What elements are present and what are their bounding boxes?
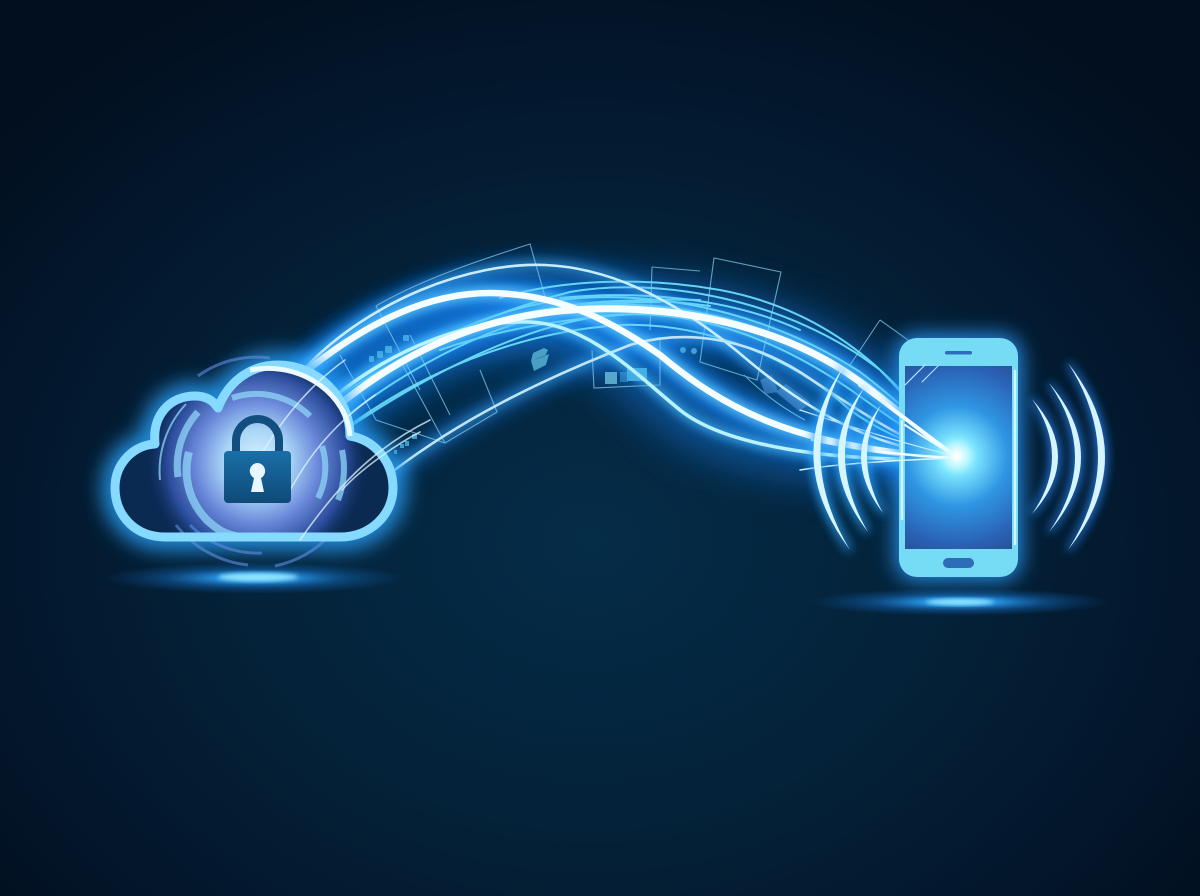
light stream: bright strands	[305, 265, 955, 472]
cloud outline	[115, 365, 393, 537]
floor glow under cloud	[105, 562, 405, 594]
phone glow	[895, 334, 1022, 581]
padlock shackle	[236, 419, 279, 455]
light stream halo	[305, 265, 955, 472]
light stream: thin bundle	[325, 282, 955, 456]
cloud with padlock	[105, 350, 430, 574]
padlock	[224, 419, 291, 503]
phone body	[899, 338, 1018, 577]
signal waves, left of phone	[813, 366, 883, 550]
cloud glow	[115, 365, 393, 537]
phone screen	[905, 366, 1012, 549]
floor glow under phone	[810, 588, 1110, 616]
keyhole	[250, 463, 265, 492]
padlock body	[224, 451, 291, 503]
cloud-top stream crossing	[252, 360, 430, 540]
bright screen edges	[902, 370, 1015, 545]
cloud bright base	[175, 533, 340, 541]
floating data panels	[340, 244, 915, 443]
phone speaker	[945, 351, 972, 354]
signal waves, right of phone	[1032, 363, 1105, 550]
light stream end over phone	[800, 365, 969, 470]
phone home button	[943, 558, 974, 568]
cloud interior	[120, 370, 388, 532]
smartphone	[895, 334, 1022, 581]
small data icons	[369, 335, 810, 454]
orbit arcs outside cloud	[176, 357, 330, 566]
